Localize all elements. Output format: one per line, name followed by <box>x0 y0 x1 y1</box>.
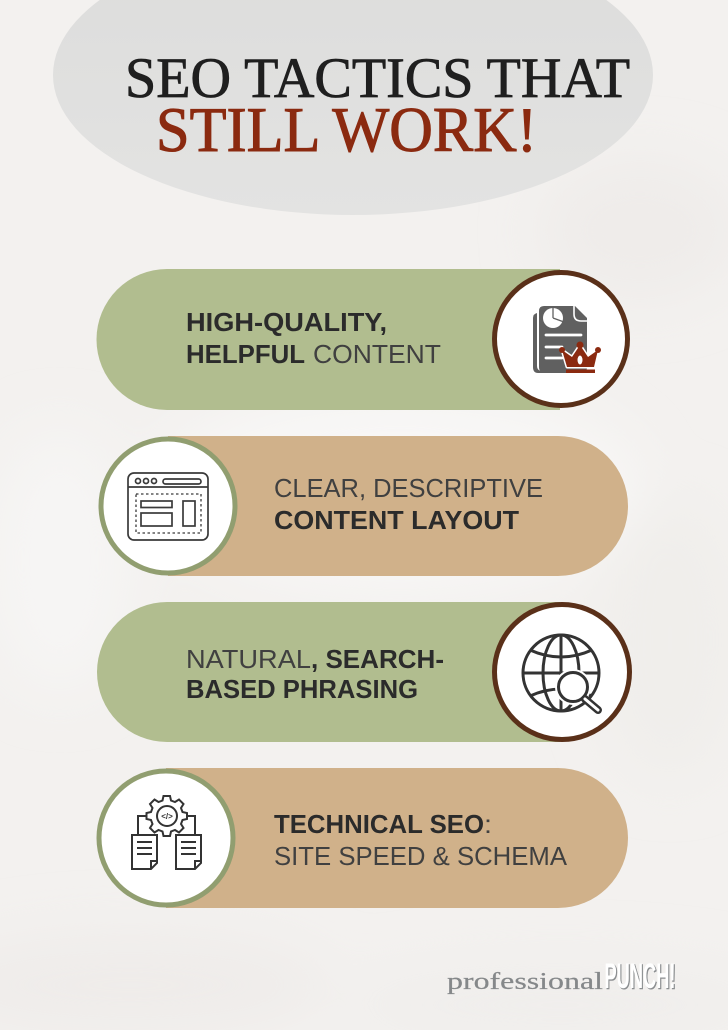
logo: professional punch: professional <box>447 969 603 995</box>
panel: high-quality content <box>96 269 627 410</box>
icon: gear and documents: </> <box>161 812 173 821</box>
pill text: CONTENT LAYOUT <box>274 505 519 535</box>
panel: technical seo <box>99 768 628 908</box>
icon: gear and documents <box>99 771 233 905</box>
pill text <box>274 809 568 871</box>
title: SEO TACTICS THAT <box>125 47 630 110</box>
pill text: : <box>484 809 492 839</box>
title: STILL WORK! <box>156 95 537 165</box>
title <box>125 47 630 165</box>
pill background <box>96 269 560 410</box>
pill text <box>274 473 543 535</box>
pill text: , SEARCH- <box>311 644 444 674</box>
pill text: SITE SPEED & SCHEMA <box>274 841 568 871</box>
panel: content layout <box>101 436 628 576</box>
pill text: HIGH-QUALITY, <box>186 307 387 337</box>
pill background <box>97 602 560 742</box>
pill text: BASED PHRASING <box>186 674 418 704</box>
pill text: CLEAR, DESCRIPTIVE <box>274 473 543 503</box>
logo: professional punch <box>447 957 676 997</box>
title ellipse <box>53 0 653 215</box>
pill text: HELPFUL <box>186 339 305 369</box>
pill background <box>168 436 628 576</box>
icon: globe with magnifier <box>494 604 630 740</box>
pill background <box>166 768 628 908</box>
pill text: CONTENT <box>313 339 441 369</box>
icon: document with crown <box>494 272 628 406</box>
icon: browser window layout <box>101 439 235 573</box>
pill text: TECHNICAL SEO <box>274 809 484 839</box>
panel: natural phrasing <box>97 602 630 742</box>
pill text <box>186 307 441 369</box>
pill text: NATURAL <box>186 644 311 674</box>
pill text <box>186 644 444 704</box>
